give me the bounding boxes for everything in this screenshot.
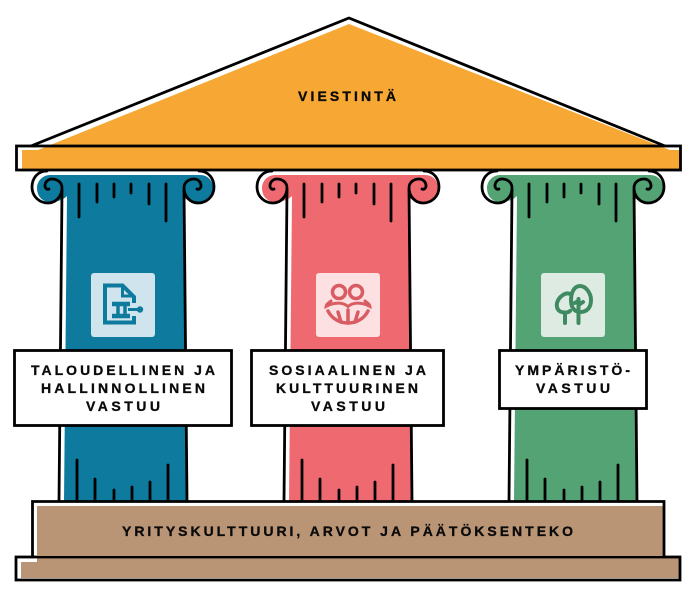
column: ympäristö (green) xyxy=(482,171,664,501)
icon: document tile xyxy=(91,273,155,337)
label: sosiaalinen ja kulttuurinen vastuu: SOSIAALINEN JA xyxy=(269,362,426,378)
icon: people tile xyxy=(316,273,380,337)
label: taloudellinen ja hallinnollinen vastuu: HALLINNOLLINEN xyxy=(41,380,205,396)
label: taloudellinen ja hallinnollinen vastuu: VASTUU xyxy=(86,398,160,414)
icon: trees tile xyxy=(541,273,605,337)
column: taloudellinen (teal) xyxy=(32,171,214,501)
roof heading: VIESTINTÄ xyxy=(298,88,396,104)
label: ympäristövastuu: YMPÄRISTÖ- xyxy=(515,362,630,378)
label: sosiaalinen ja kulttuurinen vastuu xyxy=(252,350,444,426)
label: sosiaalinen ja kulttuurinen vastuu: KULTTUURINEN xyxy=(276,380,418,396)
label: taloudellinen ja hallinnollinen vastuu xyxy=(14,350,232,426)
upper base plinth xyxy=(32,502,664,556)
base caption: YRITYSKULTTUURI, ARVOT JA PÄÄTÖKSENTEKO xyxy=(122,523,573,539)
roof pediment xyxy=(16,18,680,170)
lower base step xyxy=(16,556,680,580)
label: ympäristövastuu xyxy=(500,350,646,408)
label: sosiaalinen ja kulttuurinen vastuu: VASTUU xyxy=(311,398,385,414)
label: ympäristövastuu: VASTUU xyxy=(536,380,610,396)
column: sosiaalinen (red) xyxy=(257,171,439,501)
label: taloudellinen ja hallinnollinen vastuu: TALOUDELLINEN JA xyxy=(31,362,215,378)
